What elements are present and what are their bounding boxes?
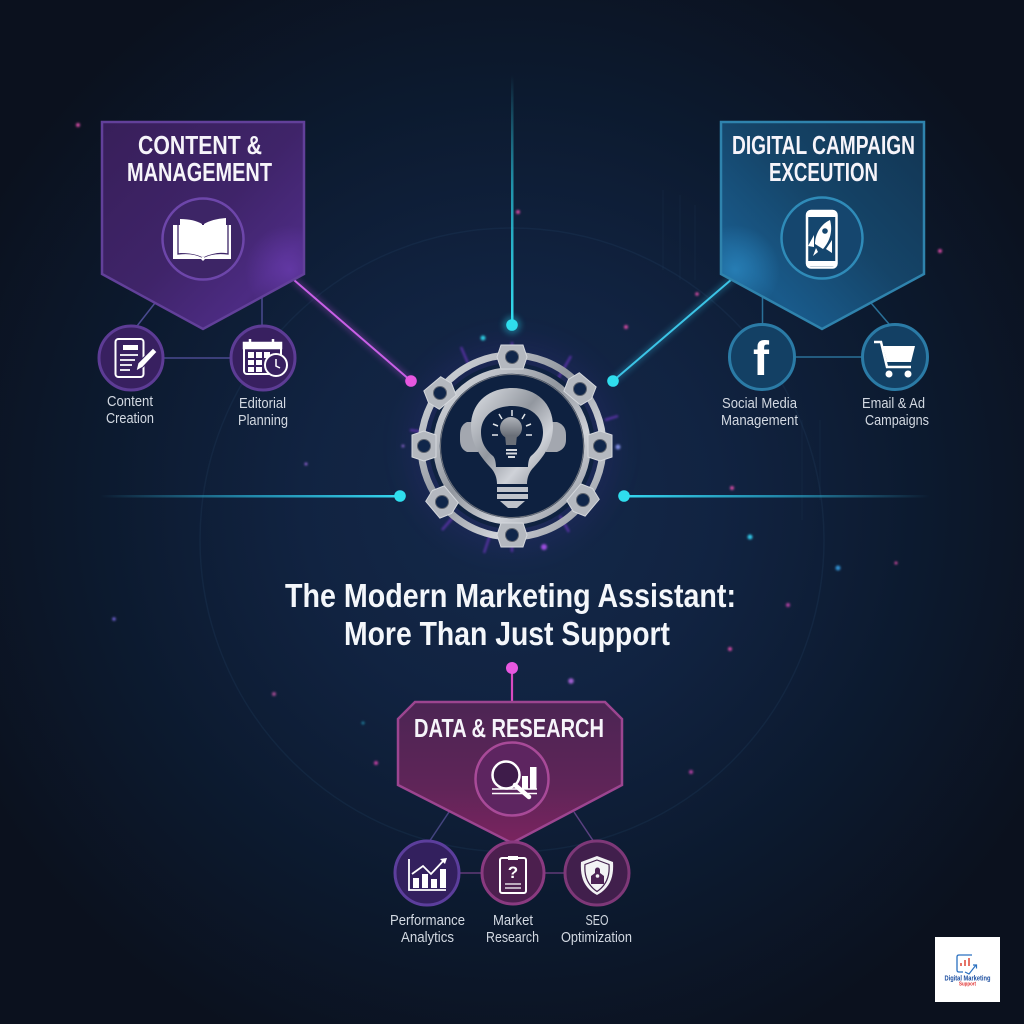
item: market research: [482, 842, 544, 946]
item: performance analytics: Analytics: [401, 929, 454, 946]
bulb screw base: [497, 487, 528, 508]
item: content creation: Content: [107, 393, 154, 410]
central gear hub with bulb: [407, 341, 618, 553]
heading: MANAGEMENT: [127, 159, 272, 187]
item: editorial planning: Editorial: [239, 395, 286, 412]
item: email and ad campaigns: Email & Ad: [862, 395, 925, 412]
connector: left horizontal line: [100, 490, 406, 502]
item: seo optimization: SEO: [586, 912, 608, 929]
heading: [127, 132, 272, 187]
icon: open book: [162, 198, 244, 280]
panel: data and research: [390, 702, 632, 946]
icon: phone with rocket: [782, 198, 862, 278]
item: email and ad campaigns: [862, 324, 929, 429]
item: performance analytics: Performance: [390, 912, 465, 929]
logo badge: Digital Marketing: [944, 976, 990, 982]
item: seo optimization: [561, 841, 632, 946]
small inner bulb: [500, 417, 522, 439]
item: email and ad campaigns: Campaigns: [865, 412, 929, 429]
item: market research: ?: [508, 863, 518, 882]
gear holes: [418, 350, 606, 542]
heading: EXCEUTION: [769, 159, 878, 187]
heading: [732, 132, 915, 187]
logo badge: [935, 937, 1000, 1002]
item: content creation: [99, 326, 163, 427]
item: social media management: f: [753, 333, 770, 386]
faint background ring: [200, 190, 824, 852]
item: performance analytics: [390, 841, 465, 946]
item: social media management: [721, 324, 799, 429]
connector: magenta to data panel: [506, 662, 518, 703]
particle dots: [76, 123, 942, 774]
item: social media management: Management: [721, 412, 799, 429]
connector: magenta to content panel: [294, 280, 417, 387]
connector: right horizontal line: [618, 490, 930, 502]
title: [285, 578, 736, 653]
bulb rays: [492, 410, 532, 435]
title: More Than Just Support: [344, 616, 670, 653]
panel: content and management: [98, 120, 306, 428]
item: editorial planning: Planning: [238, 412, 288, 429]
heading: DIGITAL CAMPAIGN: [732, 132, 915, 160]
gear nubs: [412, 345, 612, 547]
item: seo optimization: Optimization: [561, 929, 632, 946]
item: social media management: Social Media: [722, 395, 798, 412]
connector: cyan to campaign panel: [607, 279, 732, 387]
heading: CONTENT &: [138, 132, 262, 160]
title: The Modern Marketing Assistant:: [285, 578, 736, 615]
panel: digital campaign execution: [720, 120, 929, 428]
logo badge: Support: [959, 982, 976, 988]
item: content creation: Creation: [106, 410, 154, 427]
item: market research: Market: [493, 912, 534, 929]
purple sparks behind gear: [410, 342, 618, 553]
icon: magnifier and bars: [476, 742, 548, 816]
heading: DATA & RESEARCH: [414, 715, 604, 743]
robot ears: [460, 422, 566, 452]
item: editorial planning: [231, 326, 295, 429]
bulb body: [471, 388, 553, 484]
connector: top vertical line: [503, 75, 521, 334]
item: market research: Research: [486, 929, 539, 946]
